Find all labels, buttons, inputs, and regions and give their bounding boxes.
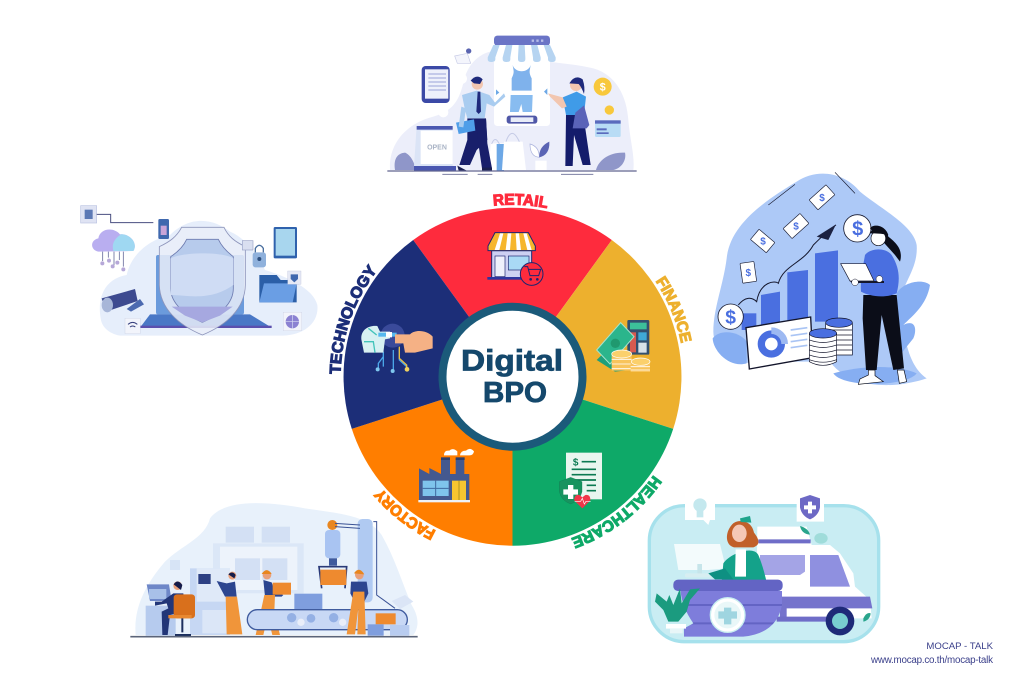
- label: factory: FACTORY: [372, 490, 436, 541]
- illustration: factory: [130, 503, 418, 637]
- cloud: [92, 230, 135, 271]
- floating bills: [740, 185, 835, 283]
- icon: money: [597, 320, 650, 372]
- icon: medical bill: $: [573, 457, 579, 468]
- worker in front of belt: [347, 570, 368, 634]
- lightbulb note: [685, 493, 715, 525]
- dashboard card: [746, 317, 813, 369]
- coin stacks: [809, 318, 852, 365]
- security camera: [102, 289, 144, 312]
- illustration: finance: $: [852, 219, 863, 241]
- reception desk: [673, 580, 783, 637]
- icon: medical bill: [559, 453, 602, 508]
- plant: [655, 588, 700, 633]
- hub: BPO: [483, 377, 547, 409]
- icon: factory building: [418, 449, 474, 502]
- monitor: [674, 544, 726, 577]
- sector: finance: [512, 240, 681, 429]
- laptop: [140, 255, 272, 328]
- illustration: finance: [713, 172, 930, 385]
- folder: [259, 271, 301, 302]
- control panel: [190, 568, 230, 635]
- sector: factory: [352, 377, 512, 546]
- sector: technology: [344, 240, 512, 429]
- woman with laptop: [841, 226, 907, 384]
- padlock: [253, 245, 266, 267]
- footer credit: [870, 641, 994, 666]
- illustration: healthcare: [649, 493, 879, 642]
- label: technology: TECHNOLOGY: [329, 263, 376, 374]
- wheel: [329, 193, 692, 549]
- open sign: [414, 126, 456, 171]
- sector: retail: [413, 208, 612, 377]
- robot arm: [319, 519, 395, 608]
- bar chart: [742, 250, 838, 330]
- operator at desk: [146, 581, 195, 636]
- illustration: finance: $: [746, 268, 752, 279]
- conveyor belt: [247, 594, 413, 636]
- illustration: retail: $: [600, 82, 606, 94]
- hub: Digital: [461, 344, 563, 378]
- icon: touch technology: [361, 324, 433, 373]
- illustration: finance: $: [760, 237, 766, 248]
- label: retail: RETAIL: [493, 193, 548, 209]
- worker with box: [256, 570, 291, 635]
- footer credit: MOCAP - TALK: [926, 641, 994, 652]
- illustration: finance: $: [725, 308, 736, 329]
- potted plant: [530, 142, 549, 170]
- illustration: finance: $: [793, 222, 799, 233]
- label: healthcare: HEALTHCARE: [570, 475, 662, 549]
- illustration: retail: [387, 36, 637, 174]
- hub: [442, 307, 582, 447]
- illustration: technology: [81, 206, 317, 336]
- worker at panel: [217, 572, 242, 634]
- shield: [159, 227, 245, 335]
- open sign: OPEN: [427, 144, 447, 151]
- nurse: [708, 516, 767, 582]
- woman: [548, 77, 591, 166]
- illustration: finance: $: [819, 193, 825, 204]
- label: finance: FINANCE: [655, 275, 692, 344]
- man: [456, 77, 505, 171]
- footer credit: www.mocap.co.th/mocap-talk: [870, 655, 993, 666]
- sector: healthcare: [512, 377, 673, 546]
- shopping bags: [489, 133, 526, 171]
- icon: shop: [487, 233, 543, 285]
- ambulance: [757, 526, 872, 635]
